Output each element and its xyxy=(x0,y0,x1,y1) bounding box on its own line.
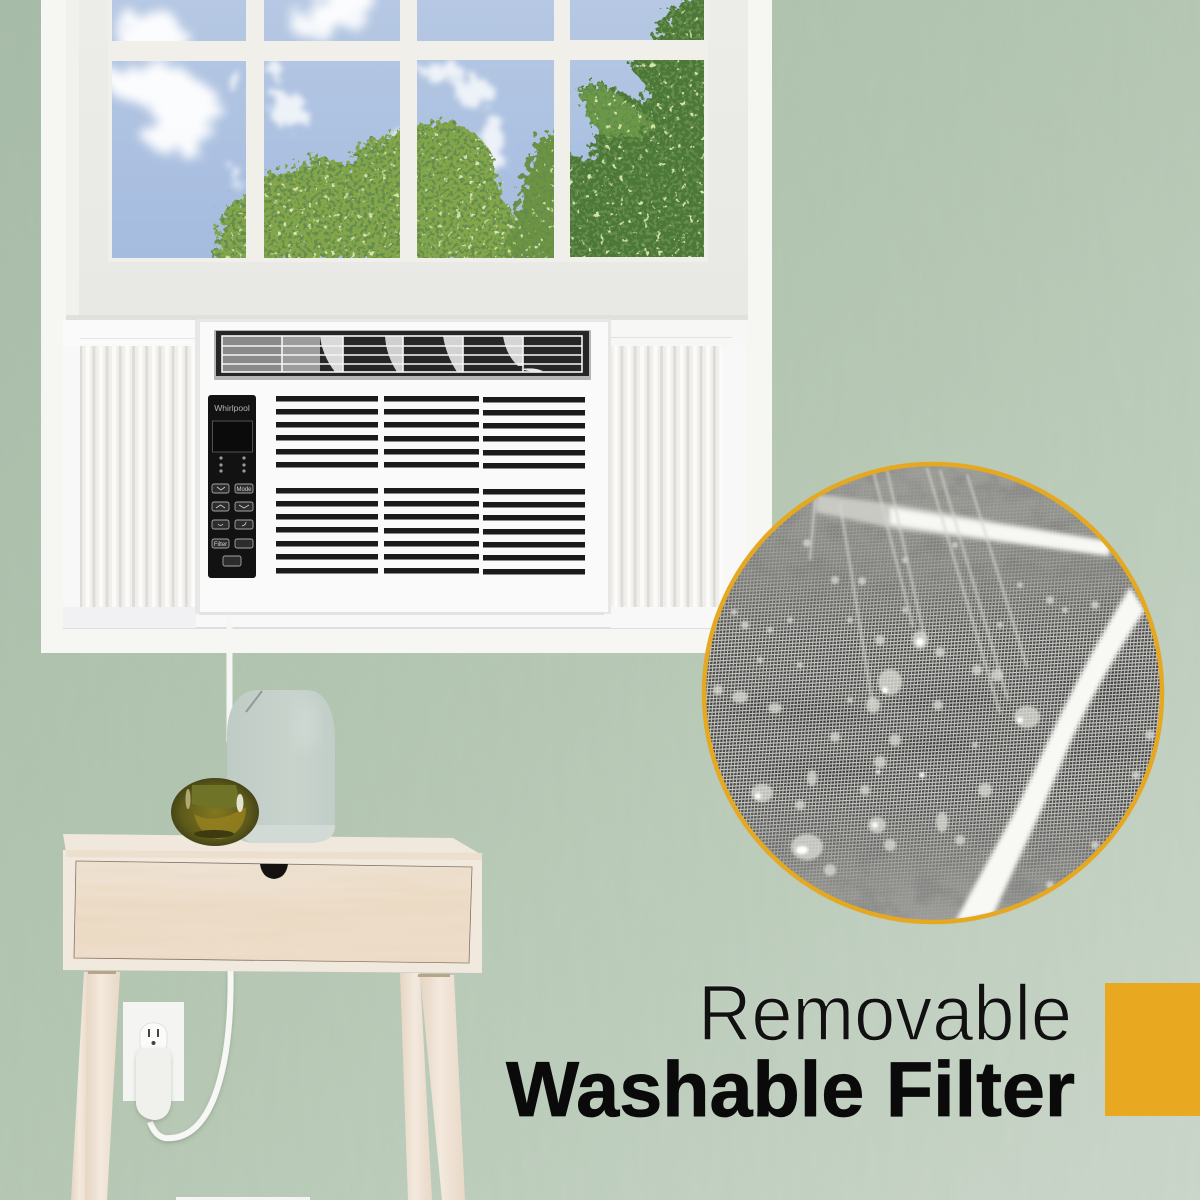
top air vent xyxy=(214,330,591,380)
plug xyxy=(136,1048,171,1120)
power cord lower xyxy=(150,970,231,1138)
mottled filter tone xyxy=(751,468,1064,918)
control panel: Filter xyxy=(214,542,227,548)
outlet plate xyxy=(123,1002,184,1101)
droplet highlights xyxy=(755,638,1023,854)
window sill shadow xyxy=(66,315,748,320)
fan blades xyxy=(222,336,282,372)
heading line one: Removable xyxy=(698,968,1072,1057)
panel buttons xyxy=(212,484,253,566)
paper on floor xyxy=(176,1197,310,1200)
table legs xyxy=(71,971,465,1200)
window sash xyxy=(66,0,748,320)
AC body xyxy=(195,319,611,614)
side table xyxy=(63,834,482,1200)
indicator icons xyxy=(219,456,246,473)
vent grille xyxy=(222,336,582,372)
tree: mid foliage xyxy=(500,129,574,258)
heading xyxy=(506,968,1075,1133)
gold accent block xyxy=(1105,983,1200,1116)
table top surface xyxy=(63,834,482,855)
dark mesh patches xyxy=(744,676,1132,776)
gold circle outline xyxy=(704,464,1162,922)
lower frame panel xyxy=(63,320,746,628)
clouds xyxy=(108,0,381,154)
thin cloud wisps xyxy=(229,58,506,195)
right accordion panel xyxy=(610,320,746,628)
button glyphs xyxy=(216,487,249,526)
glass bowl xyxy=(171,778,259,846)
drawer notch xyxy=(260,864,288,879)
vase xyxy=(227,690,335,843)
tree: light foliage xyxy=(212,120,526,262)
front louvers xyxy=(276,396,585,574)
tree: dark foliage xyxy=(570,0,704,257)
display xyxy=(212,421,252,452)
window xyxy=(41,0,772,653)
wall outlet xyxy=(123,1002,184,1120)
outdoor view xyxy=(100,0,720,270)
water streams xyxy=(810,468,1027,713)
heading line two: Washable Filter xyxy=(506,1045,1075,1133)
power cord upper xyxy=(226,612,232,742)
water droplets xyxy=(713,539,1155,889)
table body xyxy=(63,850,482,973)
magnified filter circle xyxy=(700,460,1170,930)
brand name: Whirlpool xyxy=(214,403,250,413)
air conditioner xyxy=(195,319,611,615)
left accordion panel xyxy=(63,320,196,628)
window frame xyxy=(41,0,772,653)
button labels: Mode xyxy=(236,487,252,493)
control panel xyxy=(208,395,256,578)
filter base xyxy=(700,460,1170,930)
drawer front xyxy=(74,861,472,963)
receptacle xyxy=(140,1023,167,1055)
filter frame strips xyxy=(815,494,1145,922)
mesh texture xyxy=(706,512,1160,894)
